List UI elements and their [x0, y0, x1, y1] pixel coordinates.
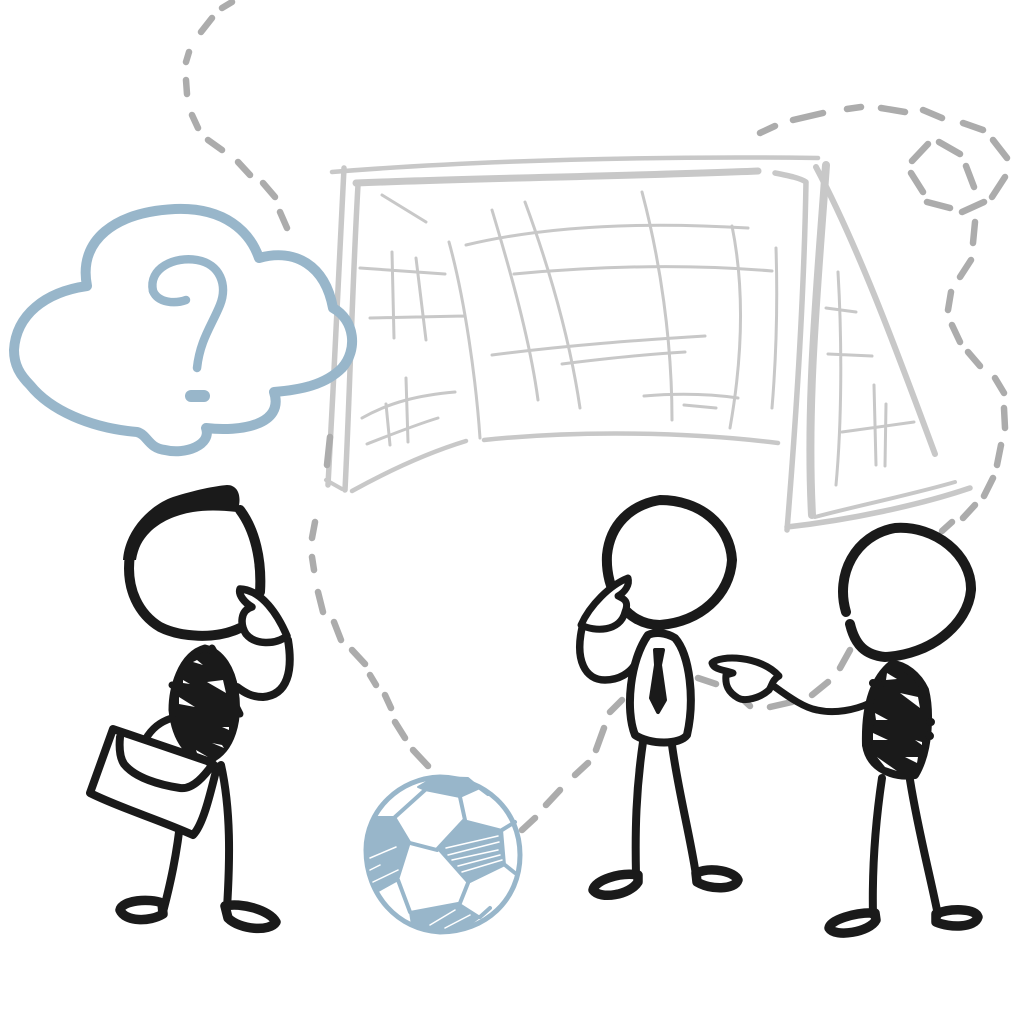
head [607, 500, 732, 625]
scribble torso [866, 664, 931, 776]
goal mesh [360, 192, 914, 485]
legs [163, 765, 229, 912]
pointing hand [712, 658, 779, 700]
question mark [152, 259, 223, 396]
torso [630, 633, 691, 742]
hand [581, 578, 628, 629]
head [843, 528, 971, 657]
scribble torso [172, 648, 240, 760]
pointing arm [775, 687, 870, 712]
feet [120, 900, 163, 920]
arm [237, 640, 290, 697]
hair [123, 485, 240, 560]
dashed ball path [186, 2, 1007, 830]
briefcase handle [145, 718, 172, 740]
arm [580, 628, 634, 680]
head [129, 510, 260, 636]
cloud outline [14, 209, 352, 451]
goal frame [326, 158, 970, 530]
ball seams [378, 788, 515, 917]
feet [829, 913, 876, 933]
hand [240, 589, 287, 643]
soccer ball [366, 777, 520, 932]
goal net [326, 158, 970, 530]
middle figure [580, 500, 738, 895]
ball hatching [370, 836, 502, 928]
briefcase [90, 729, 217, 835]
left figure [90, 485, 290, 928]
ball patches [367, 777, 505, 932]
thought cloud [14, 209, 352, 451]
legs [636, 742, 696, 875]
right figure [712, 528, 978, 933]
tie [651, 650, 665, 712]
feet [593, 874, 638, 895]
legs [873, 778, 938, 915]
ball outline [366, 777, 520, 932]
briefcase flap [120, 737, 213, 788]
